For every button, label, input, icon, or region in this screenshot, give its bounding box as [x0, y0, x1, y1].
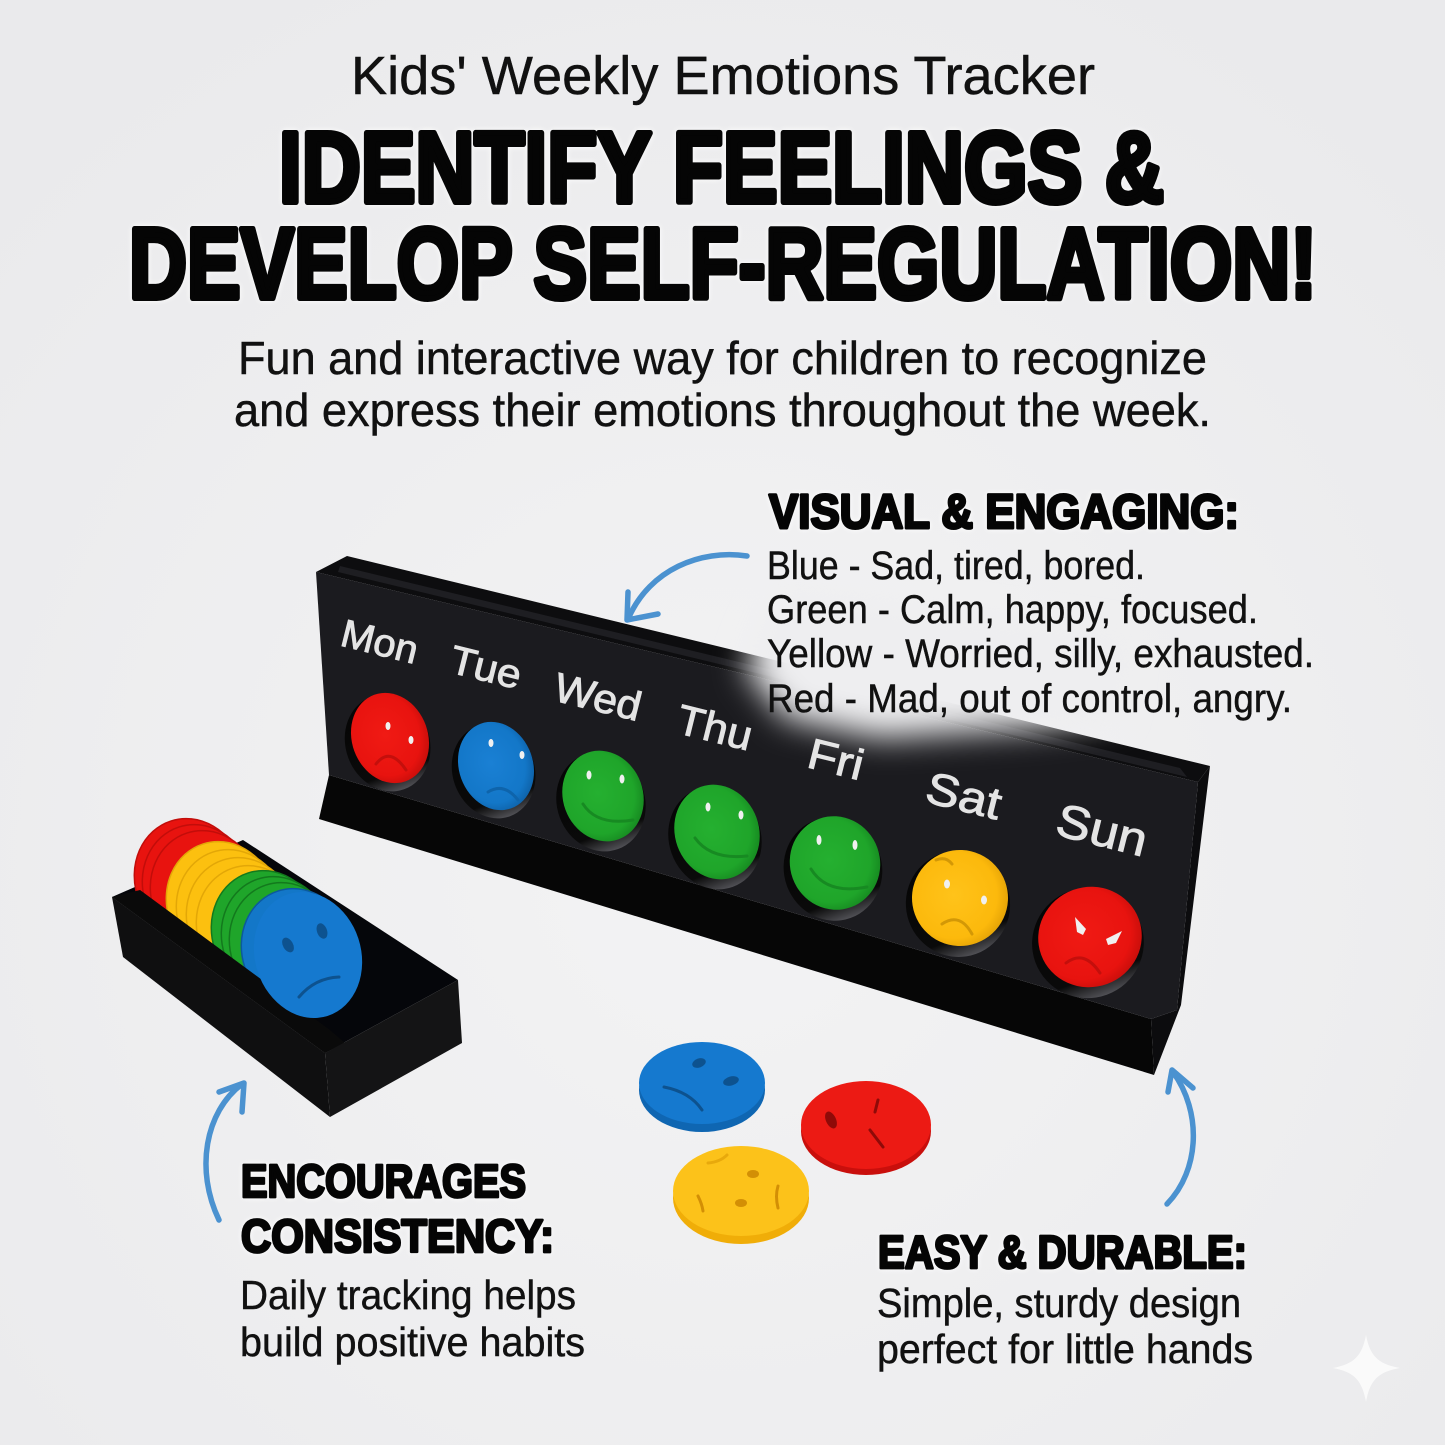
callout heading: VISUAL & ENGAGING:: [769, 486, 1239, 539]
board right side: [1151, 766, 1210, 1075]
yellow meaning: Yellow - Worried, silly, exhausted.: [767, 632, 1314, 676]
label Sat: Sat: [921, 762, 1007, 830]
subtitle line 2: and express their emotions throughout the week.: [234, 384, 1211, 436]
callout: visual and engaging: [767, 486, 1314, 721]
arrow to board base: [1167, 1070, 1193, 1204]
face Monday red angry: [331, 682, 444, 804]
tray short wall: [325, 980, 462, 1117]
face Thursday green happy: [654, 773, 776, 903]
loose red disc: [801, 1081, 931, 1175]
tray interior: [112, 840, 458, 1053]
loose blue disc: [639, 1042, 765, 1132]
front blue sad disc: [238, 878, 378, 1032]
subtitle line 1: Fun and interactive way for children to recognize: [238, 332, 1207, 384]
label Mon: Mon: [337, 612, 423, 673]
label Wed: Wed: [550, 664, 646, 730]
arrow to tray: [206, 1083, 244, 1220]
body line 1: Daily tracking helps: [240, 1272, 576, 1318]
board front panel: [316, 572, 1198, 1019]
face Wednesday green happy: [543, 739, 659, 864]
weekly tracker board: [316, 556, 1210, 1075]
callout heading: EASY & DURABLE:: [878, 1226, 1247, 1278]
body line 1: Simple, sturdy design: [877, 1280, 1241, 1326]
label Tue: Tue: [446, 638, 526, 698]
label Sun: Sun: [1051, 793, 1153, 866]
title block: [129, 46, 1317, 436]
stacked yellow discs: [151, 827, 323, 1003]
icon: sparkle watermark: [1333, 1335, 1400, 1402]
tray long wall: [112, 897, 330, 1117]
label Fri: Fri: [803, 730, 869, 790]
red meaning: Red - Mad, out of control, angry.: [767, 677, 1292, 721]
storage tray with stacked faces: [112, 804, 462, 1117]
loose discs: [639, 1042, 931, 1244]
face Sunday red angry: [1017, 872, 1159, 1014]
second blue disc: [226, 874, 368, 1026]
arrow to board top: [627, 555, 747, 620]
body line 2: build positive habits: [240, 1319, 585, 1365]
callout: easy and durable: [877, 1226, 1253, 1372]
stacked green discs: [196, 856, 356, 1020]
day labels: [337, 612, 1153, 866]
loose yellow disc: [673, 1146, 809, 1244]
blue meaning: Blue - Sad, tired, bored.: [767, 544, 1145, 588]
callout heading line 1: ENCOURAGES: [241, 1155, 526, 1207]
eyebrow heading: Kids' Weekly Emotions Tracker: [351, 46, 1095, 106]
main heading line 1: IDENTIFY FEELINGS &: [279, 112, 1164, 224]
board top edge: [316, 556, 1210, 782]
tray rim occluding discs: [112, 890, 345, 1053]
board base: [319, 775, 1154, 1075]
face Friday green happy: [769, 803, 897, 935]
body line 2: perfect for little hands: [877, 1326, 1253, 1372]
face Saturday yellow worried: [891, 836, 1025, 972]
label Thu: Thu: [672, 695, 757, 759]
stacked red discs: [119, 804, 277, 968]
light fade over board behind callout text: [745, 590, 1125, 738]
face Tuesday blue sad: [439, 711, 549, 830]
green meaning: Green - Calm, happy, focused.: [767, 588, 1258, 632]
callout: encourages consistency: [240, 1155, 585, 1365]
callout heading line 2: CONSISTENCY:: [241, 1210, 554, 1262]
board top slot: [338, 566, 1187, 777]
